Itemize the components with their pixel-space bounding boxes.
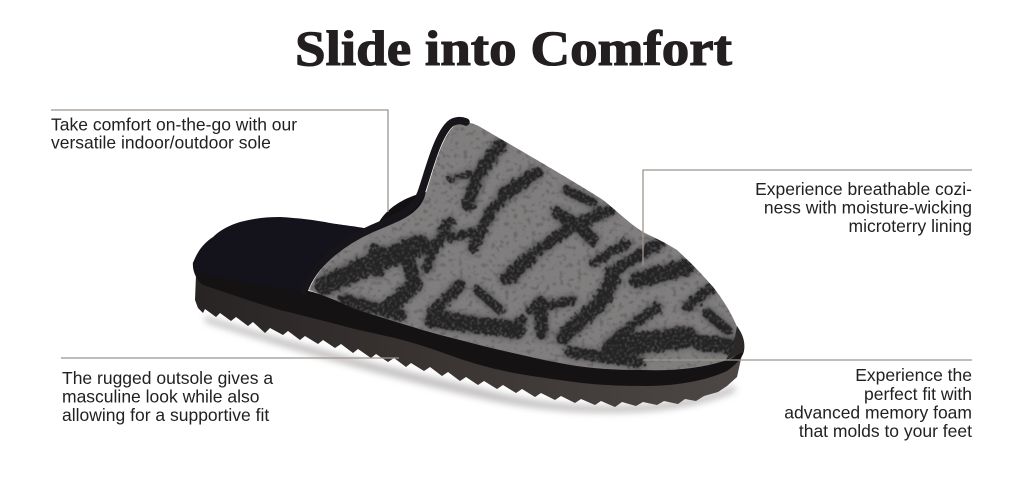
leader line [643,359,972,361]
midsole band [193,262,744,386]
leader line [61,357,399,359]
collar binding [304,121,466,291]
leader line [51,110,388,212]
callout: indoor/outdoor sole [51,110,388,212]
callout text: ness with moisture-wicking [764,198,972,218]
title: Slide into Comfort [295,20,732,76]
toe cap shadow [725,326,744,361]
slipper illustration [193,115,750,413]
callout text: Take comfort on-the-go with our [51,114,297,134]
callout text: perfect fit with [864,384,972,404]
callout: microterry lining [643,170,972,265]
callout text: The rugged outsole gives a [62,368,273,388]
callout: rugged outsole [61,358,399,425]
callout text: masculine look while also [62,386,259,406]
callout text: that molds to your feet [799,421,972,441]
outsole with tread [195,275,743,407]
gray knit upper [309,122,743,370]
callout: memory foam [643,360,972,441]
callout text: Experience breathable cozi- [755,179,972,199]
callout text: versatile indoor/outdoor sole [51,132,271,152]
callout text: microterry lining [848,216,972,236]
terry footbed [193,217,370,292]
callout text: advanced memory foam [784,402,972,422]
leader line [643,170,972,265]
callout text: Experience the [855,365,972,385]
knit grain and streak pattern [309,123,736,370]
callout text: allowing for a supportive fit [62,405,269,425]
inner heel lining [377,192,426,232]
sole shadow [205,316,735,413]
